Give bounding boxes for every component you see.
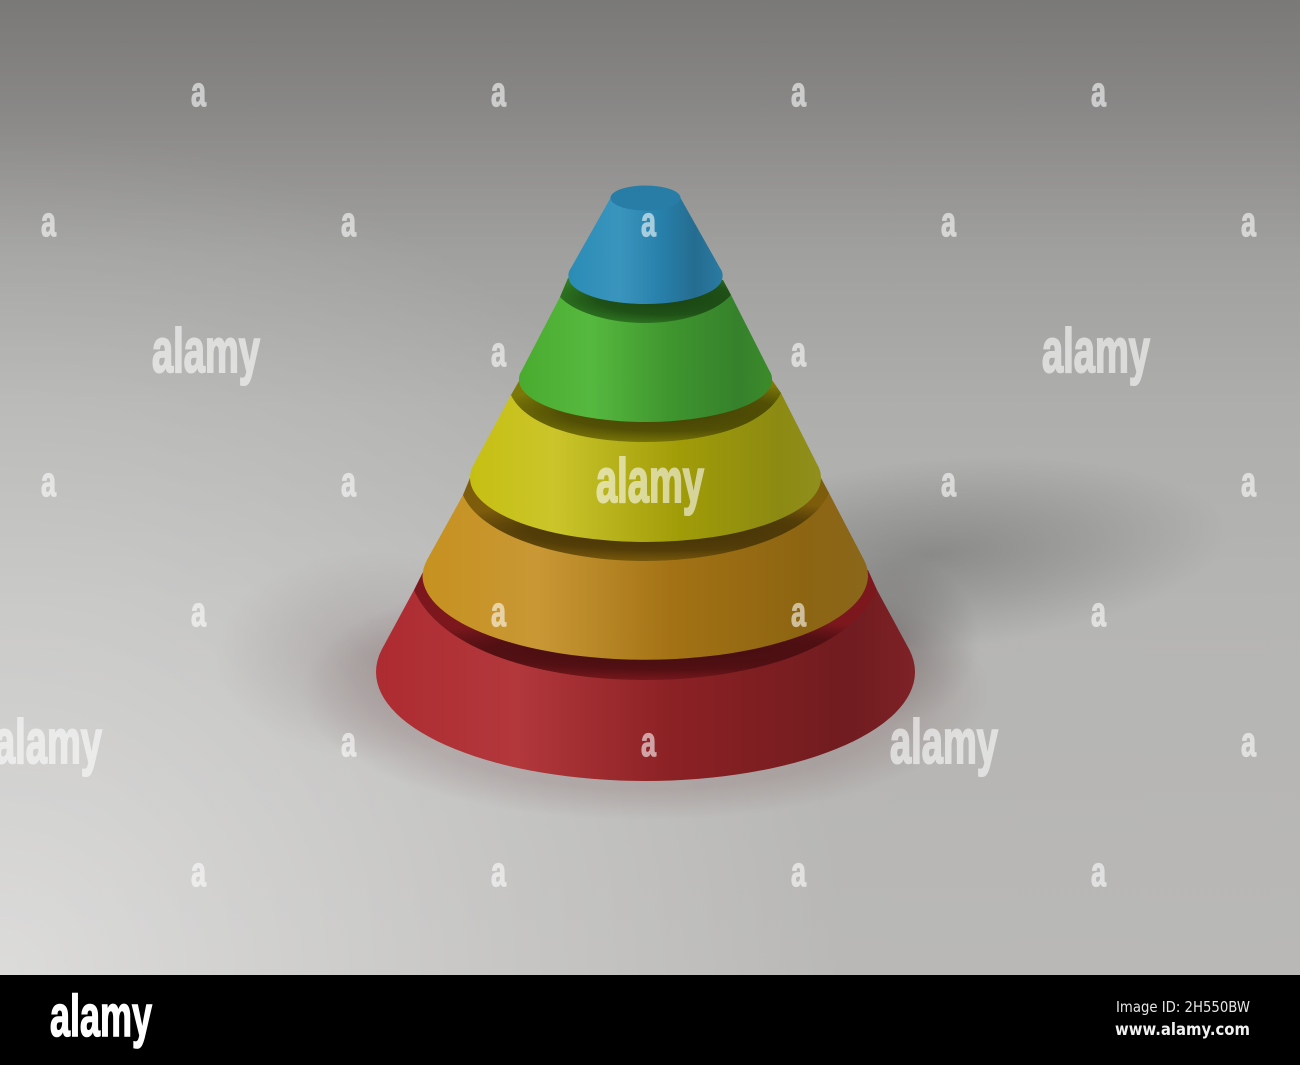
black footer bar	[0, 975, 1300, 1065]
watermark pattern: alamy	[152, 317, 260, 386]
tier 5: red base	[376, 570, 915, 781]
tier 3: yellow	[470, 380, 850, 542]
watermark pattern: a	[1091, 848, 1106, 895]
tier 1: blue top	[568, 186, 723, 304]
tier 2: green	[519, 270, 780, 422]
watermark pattern: a	[491, 588, 506, 635]
watermark pattern: a	[791, 848, 806, 895]
tier 4: orange	[422, 478, 910, 660]
watermark pattern: alamy	[1042, 317, 1150, 386]
watermark pattern: a	[341, 198, 356, 245]
watermark pattern: a	[791, 328, 806, 375]
watermark pattern: a	[41, 198, 56, 245]
watermark pattern: a	[491, 68, 506, 115]
watermark pattern: a	[791, 68, 806, 115]
watermark pattern: alamy	[890, 708, 998, 777]
watermark pattern: a	[341, 458, 356, 505]
watermark pattern: a	[341, 718, 356, 765]
watermark pattern: a	[1241, 198, 1256, 245]
watermark pattern	[0, 68, 1256, 895]
cone pyramid	[376, 186, 915, 781]
watermark pattern: a	[191, 848, 206, 895]
watermark pattern: a	[1241, 718, 1256, 765]
watermark pattern: alamy	[596, 447, 704, 516]
watermark pattern: a	[641, 718, 656, 765]
watermark pattern: a	[791, 588, 806, 635]
watermark pattern: a	[41, 458, 56, 505]
watermark pattern: a	[191, 68, 206, 115]
watermark pattern: a	[1091, 68, 1106, 115]
watermark pattern: a	[1241, 458, 1256, 505]
website: www.alamy.com	[1115, 1020, 1250, 1040]
watermark pattern: a	[1091, 588, 1106, 635]
watermark pattern: a	[491, 848, 506, 895]
footer logo: alamy	[50, 984, 152, 1049]
cast shadows on the floor	[215, 434, 1237, 820]
watermark pattern: a	[191, 588, 206, 635]
watermark pattern: a	[941, 458, 956, 505]
watermark pattern: a	[491, 328, 506, 375]
watermark pattern: a	[941, 198, 956, 245]
watermark pattern: a	[641, 198, 656, 245]
image id: Image ID: 2H550BW	[1116, 998, 1250, 1016]
